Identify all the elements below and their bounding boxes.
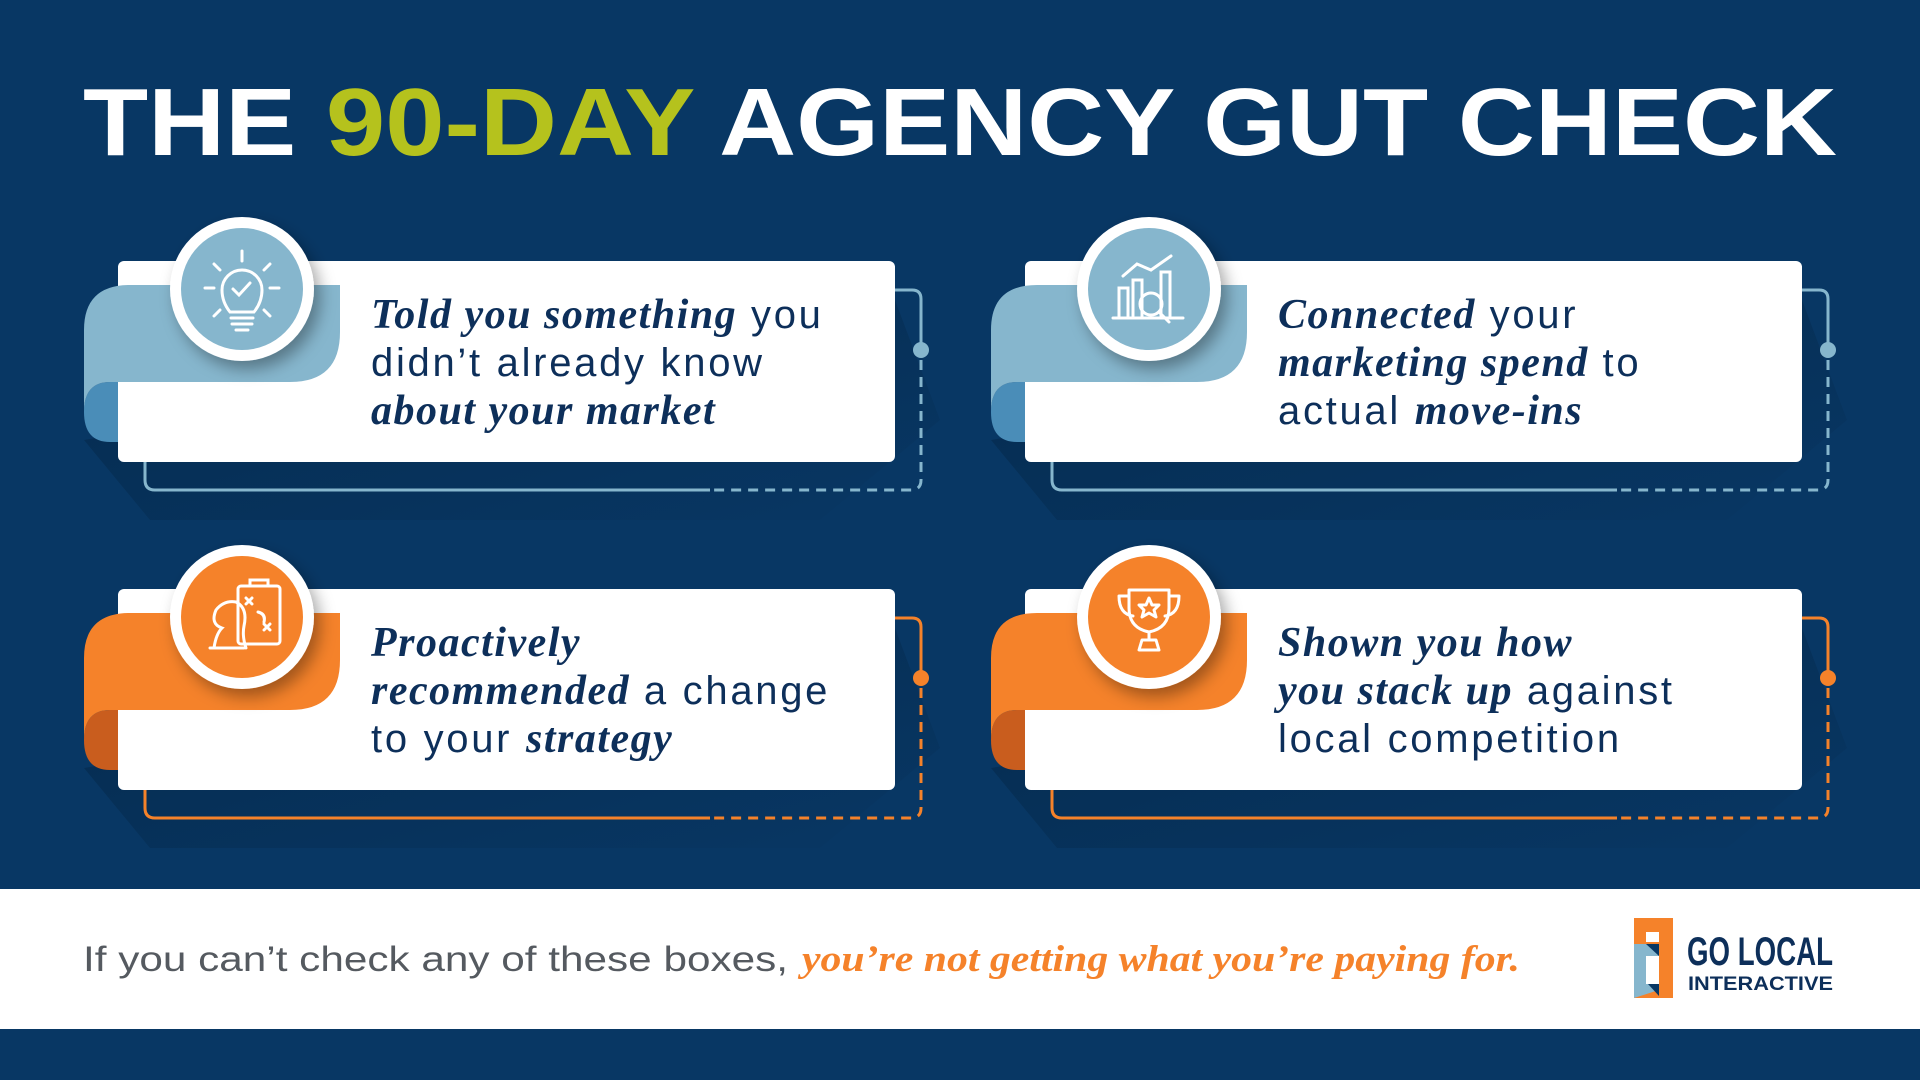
text: card 2: move-ins <box>1415 388 1583 434</box>
text: card 1: didn’t already know <box>371 341 765 385</box>
text: card 2: to <box>1589 341 1641 385</box>
text: card 3: a change <box>630 669 830 713</box>
icon: trophy <box>1077 545 1221 689</box>
panel: card 2 <box>991 217 1847 520</box>
logo: INTERACTIVE <box>1688 974 1833 995</box>
panel: card 3 <box>84 545 940 848</box>
text: card 4: against <box>1513 669 1675 713</box>
text: card 4: you stack up <box>1273 668 1513 714</box>
text: card 4: Shown you how <box>1278 620 1573 666</box>
text: card 2: actual <box>1278 389 1415 433</box>
panel: card 1 <box>84 217 940 520</box>
text: card 2: Connected your <box>1278 292 1578 338</box>
footer band <box>0 889 1920 1029</box>
footer text: If you can’t check any of these boxes, <box>83 940 788 979</box>
title: THE 90-DAY AGENCY GUT CHECK <box>83 69 1837 176</box>
text: card 2: marketing spend <box>1278 340 1589 386</box>
icon: lightbulb <box>170 217 314 361</box>
footer text <box>83 939 1520 980</box>
text: card 3: to your <box>371 717 526 761</box>
logo: GO LOCAL <box>1687 930 1833 974</box>
text: card 3: recommended <box>371 668 630 714</box>
text: card 1: Told you something you <box>371 292 824 338</box>
icon: strategy clipboard <box>170 545 314 689</box>
text: card 4: local competition <box>1278 717 1622 761</box>
text: card 3: Proactively <box>370 620 581 666</box>
panel: card 4 <box>991 545 1847 848</box>
logo <box>1634 918 1833 998</box>
text: card 1: about your market <box>371 388 716 434</box>
text: card 3: strategy <box>525 716 673 762</box>
footer text: you’re not getting what you’re paying for. <box>797 939 1520 980</box>
icon: chart with magnifier <box>1077 217 1221 361</box>
